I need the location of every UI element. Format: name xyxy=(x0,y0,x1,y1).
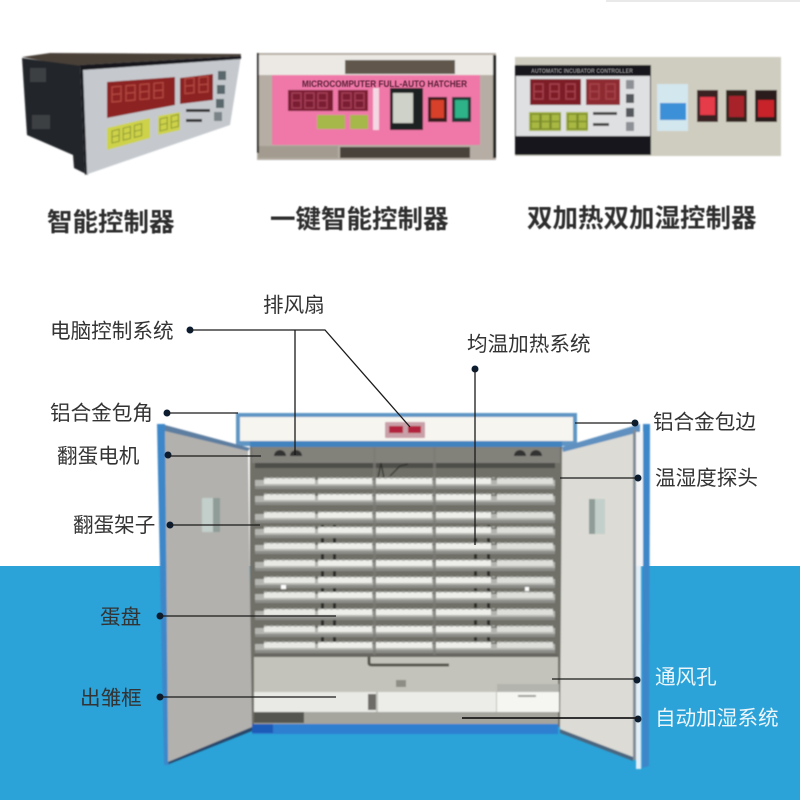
callout: ventilation hole xyxy=(552,666,717,689)
callout: egg turning motor xyxy=(57,445,261,468)
callout: egg turning motor: 翻蛋电机 xyxy=(57,445,140,468)
callout: aluminium edge: 铝合金包边 xyxy=(653,411,756,434)
callout: exhaust fan: 排风扇 xyxy=(263,294,325,317)
callout: egg tray xyxy=(100,606,336,629)
callout: uniform heating system: 均温加热系统 xyxy=(467,333,591,356)
control box on header xyxy=(385,422,425,438)
right door xyxy=(560,424,650,769)
callout: automatic humidifying system xyxy=(462,707,779,730)
cabinet interior xyxy=(250,447,562,734)
callout: uniform heating system xyxy=(467,333,591,545)
label: small text on pink panel: MICROCOMPUTER FULL-AUTO HATCHER xyxy=(302,79,467,89)
cabinet top header xyxy=(236,413,577,447)
panel: smart controller photo xyxy=(22,53,241,175)
callout: egg turning rack: 翻蛋架子 xyxy=(73,514,155,537)
heading: one-key smart controller: 一键智能控制器 xyxy=(270,206,449,234)
vertical rods xyxy=(321,525,490,653)
panel: incubator cabinet xyxy=(157,413,650,769)
callout: egg turning rack xyxy=(73,514,260,537)
callout: aluminium corner: 铝合金包角 xyxy=(50,402,153,425)
callout: hatching basket xyxy=(80,687,336,710)
egg tray shelves xyxy=(255,447,555,665)
callout: aluminium corner xyxy=(50,402,238,425)
heading: smart controller: 智能控制器 xyxy=(47,209,175,237)
label: small text on black controller band: AUTOMATIC INCUBATOR CONTROLLER xyxy=(531,69,634,75)
callout: egg tray: 蛋盘 xyxy=(100,606,141,629)
callout: automatic humidifying system: 自动加湿系统 xyxy=(655,707,779,730)
callout: aluminium edge xyxy=(575,411,756,434)
background: white upper area xyxy=(0,0,800,566)
callout: hatching basket: 出雏框 xyxy=(80,687,142,710)
callout: temperature and humidity probe: 温湿度探头 xyxy=(655,467,758,490)
panel: dual heating dual humidifying controller photo xyxy=(515,57,781,156)
background: blue lower band xyxy=(0,566,800,800)
callout: ventilation hole: 通风孔 xyxy=(655,666,717,689)
left door xyxy=(157,424,252,765)
callout: computer control system xyxy=(50,320,410,427)
callout: computer control system: 电脑控制系统 xyxy=(50,320,174,343)
heading: dual heating dual humidifying controller: 双加热双加湿控制器 xyxy=(527,205,757,233)
callout: temperature and humidity probe xyxy=(560,467,758,490)
hatching baskets xyxy=(254,680,559,712)
panel: one-key smart controller photo xyxy=(257,53,496,160)
